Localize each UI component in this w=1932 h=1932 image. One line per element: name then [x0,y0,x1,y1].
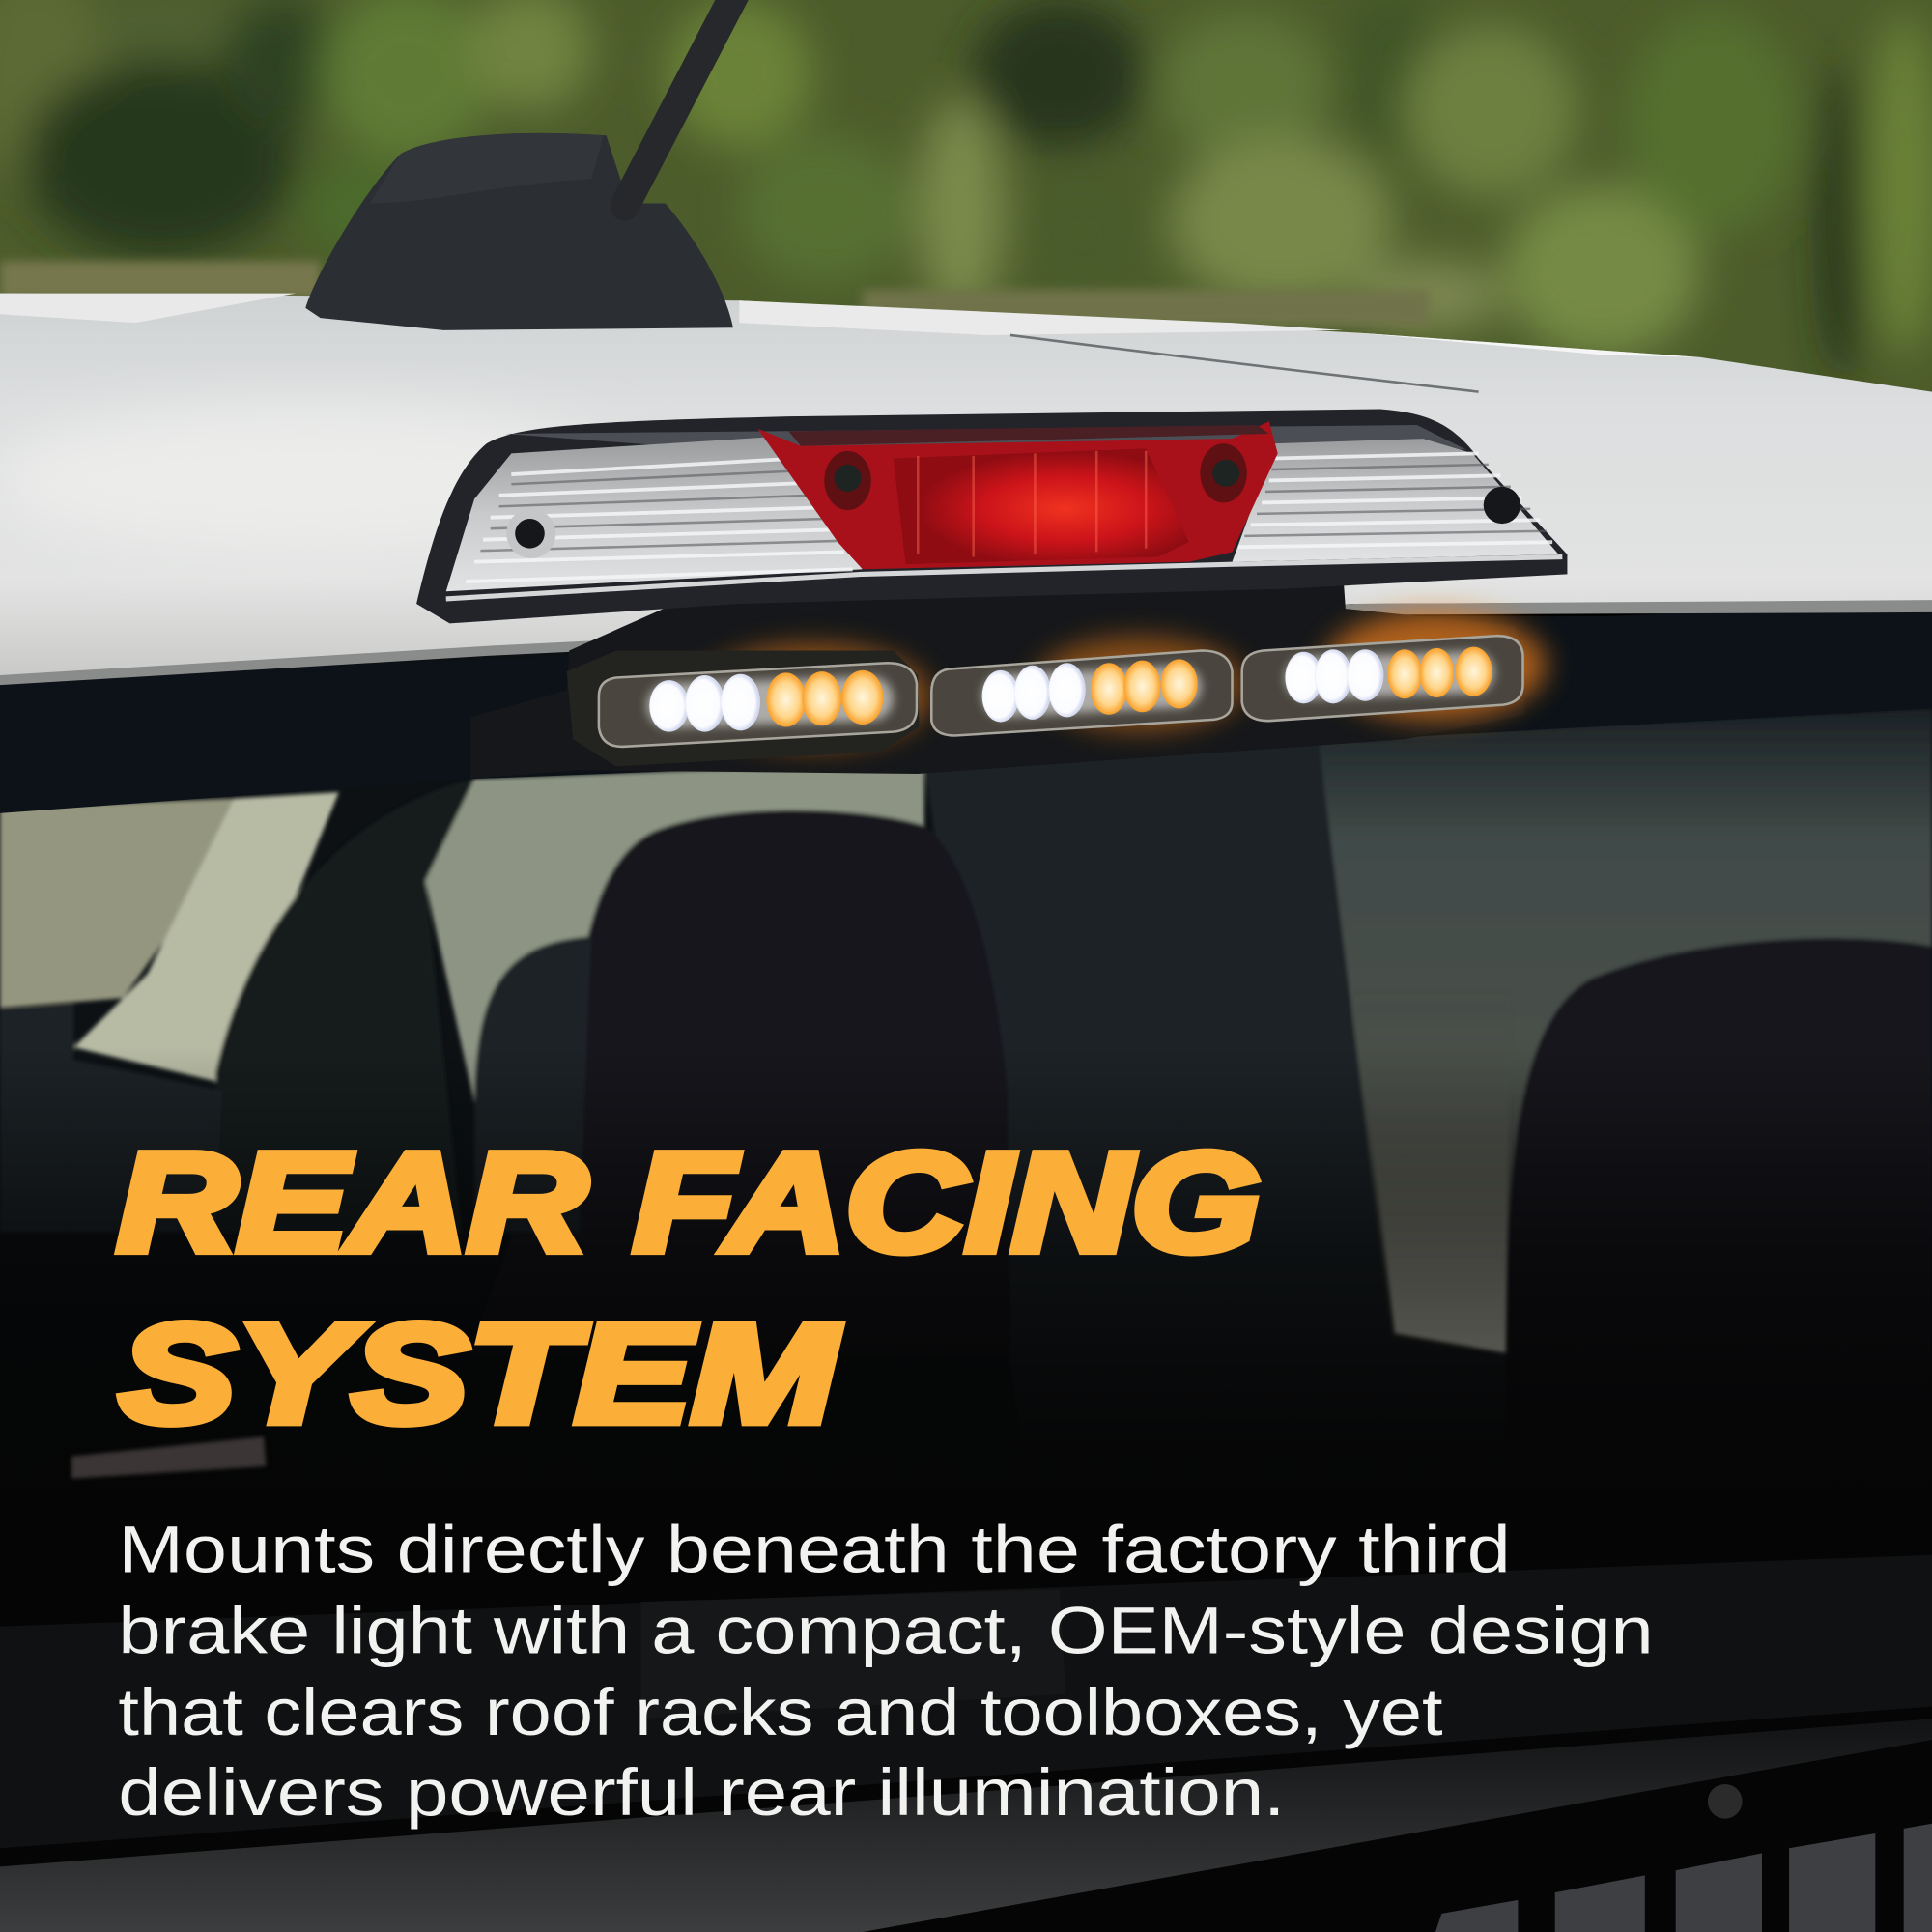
LED module 3 [1242,636,1523,721]
title: REAR FACING [117,1123,1261,1281]
glass and window reflections [0,616,1932,1932]
third brake light [416,409,1567,623]
title: SYSTEM [120,1294,840,1452]
seat silhouette [469,810,1010,1355]
LED glow [696,611,1547,748]
white truck roof [0,294,1932,685]
LED module 1 [567,650,920,766]
red lamp [757,421,1278,569]
headrest silhouette right [1506,938,1932,1479]
antenna base and rod [305,0,735,330]
truck bed rail foreground [0,1555,1932,1932]
LED module 2 [931,650,1233,735]
body description: that clears roof racks and toolboxes, yet [118,1675,1443,1749]
title [117,1123,1261,1452]
body description: Mounts directly beneath the factory third [118,1513,1511,1587]
window top dark band [0,604,1932,813]
clear lens right [1233,439,1559,562]
background: blurred trees [0,0,1932,407]
body description: delivers powerful rear illumination. [118,1755,1285,1830]
body description: brake light with a compact, OEM-style design [118,1594,1654,1668]
clear lens left [446,438,863,591]
body description [118,1513,1654,1830]
LED mounting bracket [470,573,1525,779]
